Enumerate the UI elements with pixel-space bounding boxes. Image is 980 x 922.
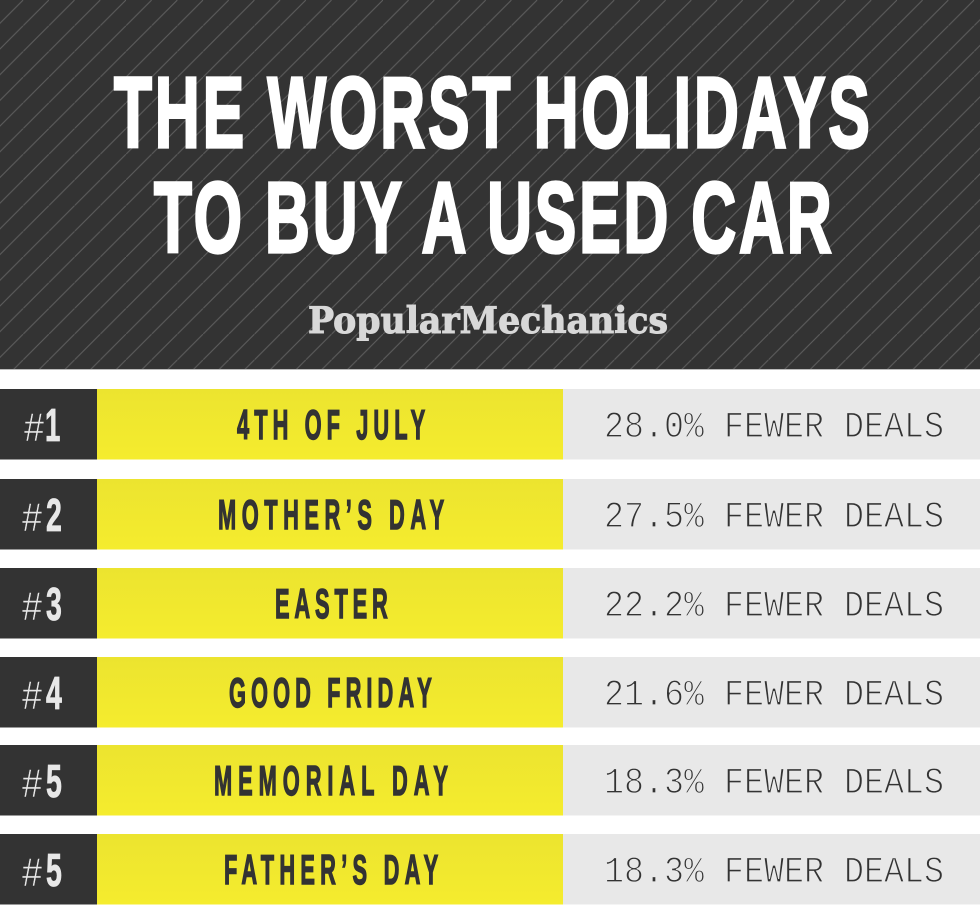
row 1: 4th of July: 4TH OF JULY xyxy=(237,403,425,449)
row 2: Mother's Day: 27.5% FEWER DEALS xyxy=(604,497,944,539)
row 3: Easter: # xyxy=(22,585,42,629)
row 4: Good Friday: # xyxy=(22,674,42,718)
row 5: Memorial Day: 18.3% FEWER DEALS xyxy=(604,763,944,805)
row 6: Father's Day: # xyxy=(22,851,42,895)
row 2: Mother's Day: # xyxy=(22,496,42,540)
row 3: Easter: 22.2% FEWER DEALS xyxy=(604,586,944,628)
row 3: Easter: EASTER xyxy=(275,582,388,628)
row 1: 4th of July: 1 xyxy=(45,401,60,452)
title: THE WORST HOLIDAYS xyxy=(114,57,870,169)
row 6: Father's Day: 18.3% FEWER DEALS xyxy=(604,852,944,894)
header panel xyxy=(0,0,980,370)
title xyxy=(114,57,870,274)
row 2: Mother's Day: MOTHER’S DAY xyxy=(218,493,444,539)
row 6: Father's Day: 5 xyxy=(46,845,62,897)
row 6: Father's Day: FATHER’S DAY xyxy=(224,848,438,894)
logo: Popular Mechanics: PopularMechanics xyxy=(308,300,668,342)
row 3: Easter xyxy=(0,568,980,638)
row 2: Mother's Day: 2 xyxy=(46,490,62,542)
row 4: Good Friday: 21.6% FEWER DEALS xyxy=(604,675,944,717)
row 4: Good Friday: GOOD FRIDAY xyxy=(229,671,432,717)
title: TO BUY A USED CAR xyxy=(154,162,832,274)
row 1: 4th of July: 28.0% FEWER DEALS xyxy=(604,407,944,449)
row 1: 4th of July xyxy=(0,389,980,460)
row 5: Memorial Day xyxy=(0,745,980,816)
row 6: Father's Day xyxy=(0,834,980,904)
row 2: Mother's Day xyxy=(0,479,980,550)
row 4: Good Friday: 4 xyxy=(46,668,62,720)
row 1: 4th of July: # xyxy=(24,406,44,450)
row 5: Memorial Day: 5 xyxy=(46,756,62,808)
row 5: Memorial Day: MEMORIAL DAY xyxy=(214,759,448,805)
row 3: Easter: 3 xyxy=(46,579,62,631)
row 5: Memorial Day: # xyxy=(22,762,42,806)
row 4: Good Friday xyxy=(0,657,980,728)
